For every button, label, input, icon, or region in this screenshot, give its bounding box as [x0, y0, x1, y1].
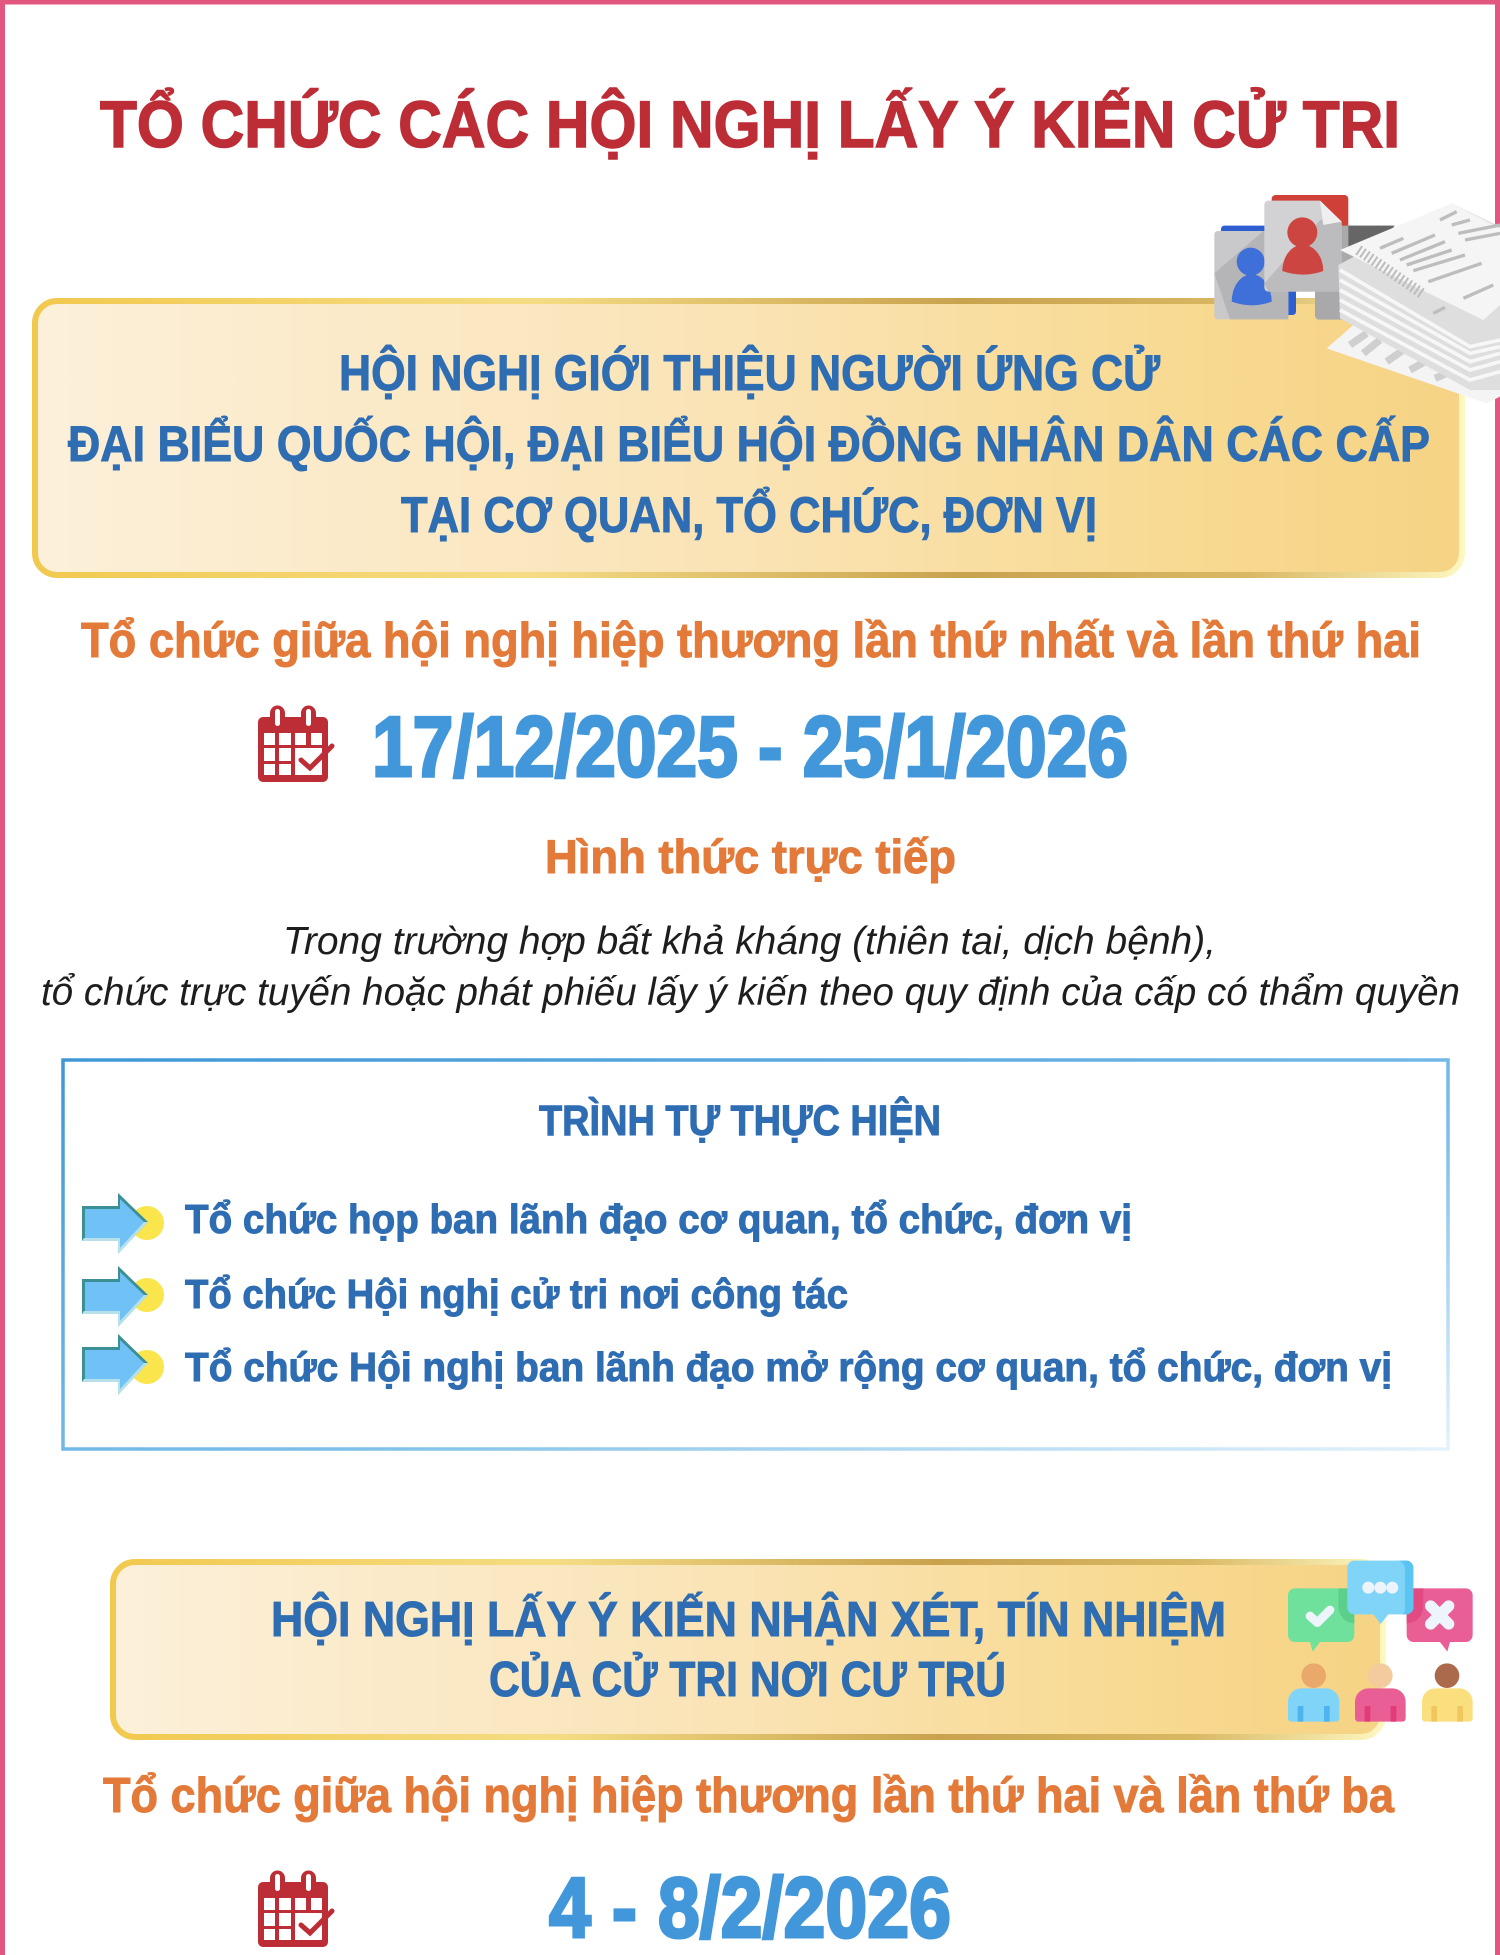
subtitle: direct format: Hình thức trực tiếp — [545, 830, 956, 883]
banner 1 text: TẠI CƠ QUAN, TỔ CHỨC, ĐƠN VỊ — [401, 486, 1097, 543]
banner 2 text: CỦA CỬ TRI NƠI CƯ TRÚ — [489, 1652, 1006, 1707]
subtitle: timing 1: Tổ chức giữa hội nghị hiệp thương lần thứ nhất và lần thứ hai — [81, 614, 1421, 668]
icon: voters with speech bubbles — [1288, 1561, 1473, 1722]
step 3: Tổ chức Hội nghị ban lãnh đạo mở rộng cơ quan, tổ chức, đơn vị — [185, 1344, 1392, 1390]
italic note: tổ chức trực tuyến hoặc phát phiếu lấy ý kiến theo quy định của cấp có thẩm quyền — [41, 971, 1460, 1014]
step 2 — [82, 1266, 848, 1327]
step 3 — [82, 1334, 1392, 1395]
person 2 — [1355, 1663, 1406, 1722]
icon: candidate documents and paper stack — [1214, 195, 1500, 403]
date 1: 17/12/2025 - 25/1/2026 — [372, 700, 1128, 795]
panel: banner 2 — [113, 1562, 1383, 1737]
italic note: Trong trường hợp bất khả kháng (thiên tai, dịch bệnh), — [283, 920, 1216, 963]
person 1 — [1288, 1663, 1339, 1722]
person 3 — [1422, 1663, 1473, 1722]
step 1 — [82, 1193, 1132, 1254]
step 1: Tổ chức họp ban lãnh đạo cơ quan, tổ chức, đơn vị — [185, 1196, 1132, 1242]
panel: banner 1 — [35, 301, 1462, 575]
italic note — [41, 920, 1460, 1014]
banner 2 text: HỘI NGHỊ LẤY Ý KIẾN NHẬN XÉT, TÍN NHIỆM — [271, 1592, 1226, 1647]
icon: calendar 2 — [258, 1870, 332, 1947]
subtitle: timing 2: Tổ chức giữa hội nghị hiệp thương lần thứ hai và lần thứ ba — [103, 1769, 1395, 1823]
banner 1 text: HỘI NGHỊ GIỚI THIỆU NGƯỜI ỨNG CỬ — [339, 344, 1160, 401]
title: TỔ CHỨC CÁC HỘI NGHỊ LẤY Ý KIẾN CỬ TRI — [100, 87, 1400, 161]
banner 1 text — [68, 344, 1430, 543]
panel: implementation steps — [63, 1060, 1448, 1449]
icon: calendar 1 — [258, 706, 332, 782]
date 2: 4 - 8/2/2026 — [549, 1861, 951, 1955]
step 2: Tổ chức Hội nghị cử tri nơi công tác — [185, 1271, 848, 1317]
banner 2 text — [271, 1592, 1226, 1707]
steps heading: TRÌNH TỰ THỰC HIỆN — [539, 1096, 941, 1145]
